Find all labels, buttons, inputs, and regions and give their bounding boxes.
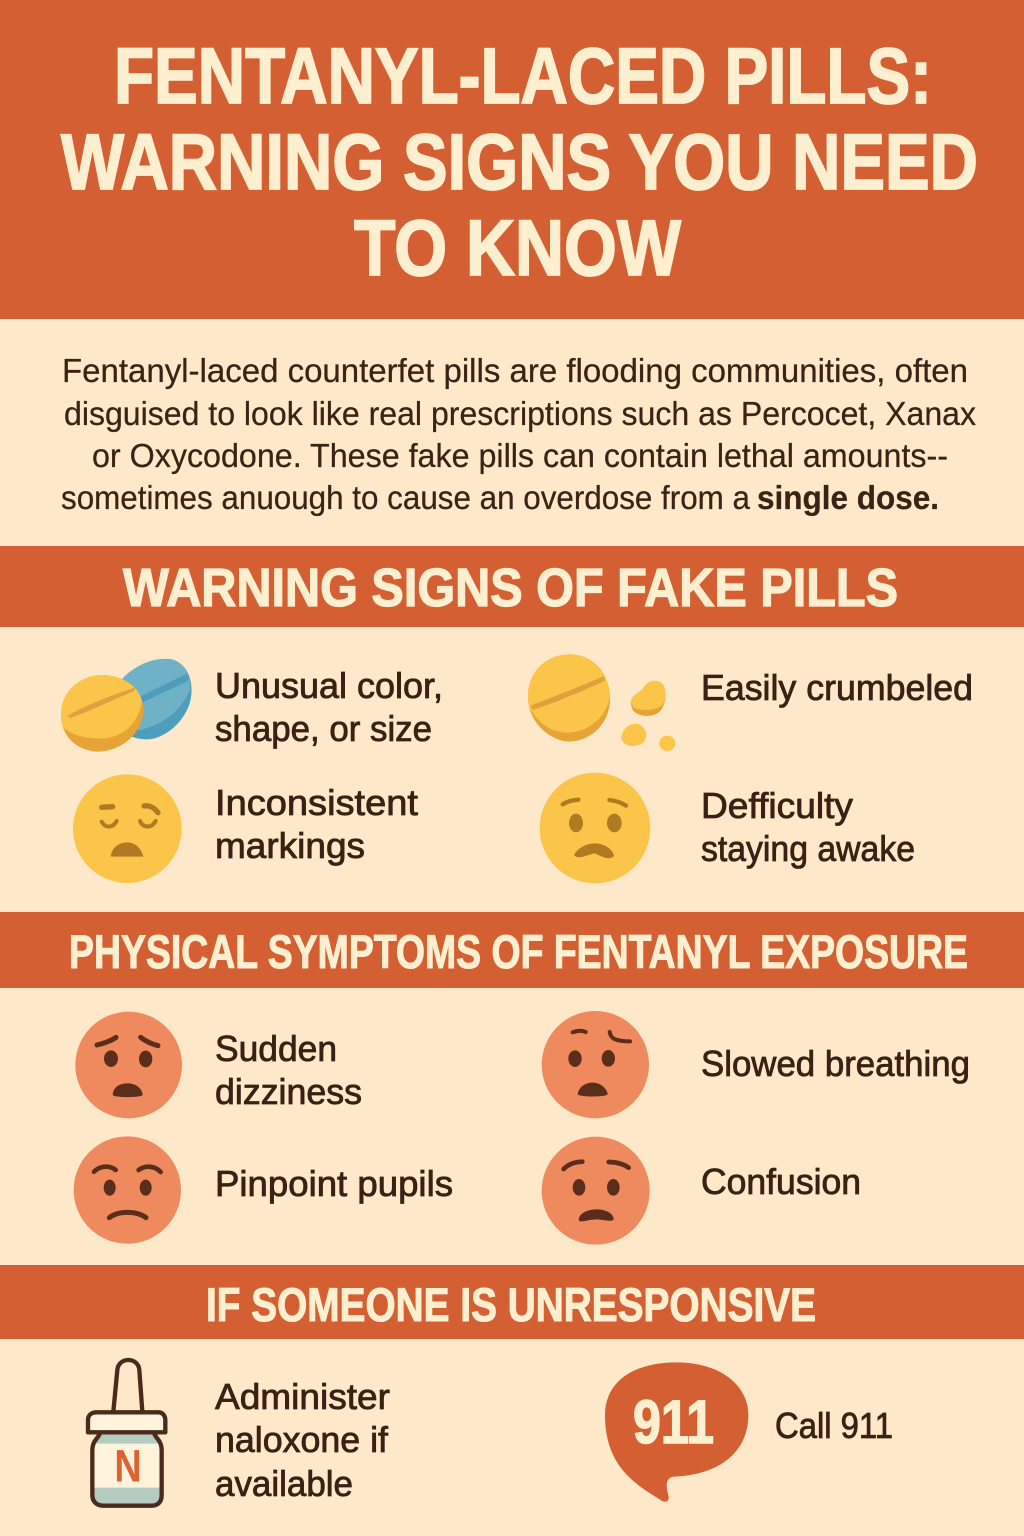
icon: 911 speech bubble	[605, 1362, 748, 1502]
intro text block: disguised to look like real prescriptions such as Percocet, Xanax	[64, 395, 976, 432]
label: unusual color: Unusual color,	[215, 665, 443, 706]
intro text block: sometimes anuough to cause an overdose from a	[61, 479, 751, 516]
label: inconsistent markings: markings	[215, 825, 365, 866]
icon: naloxone bottle: N	[114, 1441, 142, 1492]
icon: sleepy yellow face	[73, 774, 182, 883]
icon: 911 speech bubble: 911	[633, 1388, 714, 1456]
title	[61, 31, 978, 292]
icon: confused face	[542, 1137, 650, 1245]
label: administer naloxone: Administer	[215, 1376, 390, 1417]
label: sudden dizziness: dizziness	[215, 1071, 362, 1112]
panel: physical symptoms	[74, 1011, 970, 1245]
section heading: warning signs	[0, 546, 1024, 627]
label: administer naloxone: naloxone if	[215, 1419, 389, 1460]
section heading: physical symptoms	[0, 912, 1024, 988]
icon: dizzy face	[75, 1012, 182, 1118]
section heading: warning signs: WARNING SIGNS OF FAKE PILLS	[123, 558, 898, 618]
label: easily crumbeled: Easily crumbeled	[701, 667, 973, 708]
icon: worried yellow face	[540, 773, 650, 883]
icon: yellow and blue pills	[61, 659, 192, 752]
label: difficulty staying awake: Defficulty	[701, 785, 853, 826]
icon: naloxone bottle	[88, 1360, 165, 1506]
section heading: if someone is unresponsive	[0, 1265, 1024, 1339]
label: call 911: Call 911	[775, 1405, 893, 1446]
label: administer naloxone: available	[215, 1463, 353, 1504]
label: unusual color: shape, or size	[215, 708, 432, 749]
label: sudden dizziness: Sudden	[215, 1028, 337, 1069]
label: difficulty staying awake: staying awake	[701, 828, 915, 869]
icon: crumbling pill	[528, 654, 675, 751]
label: administer naloxone	[215, 1376, 390, 1504]
intro text block	[61, 352, 976, 516]
intro text block: single dose.	[757, 479, 939, 516]
label: inconsistent markings	[215, 782, 418, 866]
icon: face with raised brow	[542, 1011, 649, 1118]
label: inconsistent markings: Inconsistent	[215, 782, 418, 823]
label: pinpoint pupils: Pinpoint pupils	[215, 1163, 453, 1204]
label: difficulty staying awake	[701, 785, 915, 869]
title: TO KNOW	[354, 203, 681, 292]
label: unusual color	[215, 665, 443, 749]
label: confusion: Confusion	[701, 1161, 861, 1202]
intro text block: Fentanyl-laced counterfet pills are flooding communities, often	[62, 352, 968, 389]
title banner	[0, 0, 1024, 319]
icon: frowning face	[74, 1136, 181, 1244]
section heading: if someone is unresponsive: IF SOMEONE IS UNRESPONSIVE	[206, 1278, 816, 1331]
label: slowed breathing: Slowed breathing	[701, 1043, 970, 1084]
panel: if someone is unresponsive	[88, 1360, 893, 1506]
panel: warning signs of fake pills	[61, 654, 973, 883]
intro text block: or Oxycodone. These fake pills can contain lethal amounts--	[92, 437, 948, 474]
label: sudden dizziness	[215, 1028, 362, 1112]
